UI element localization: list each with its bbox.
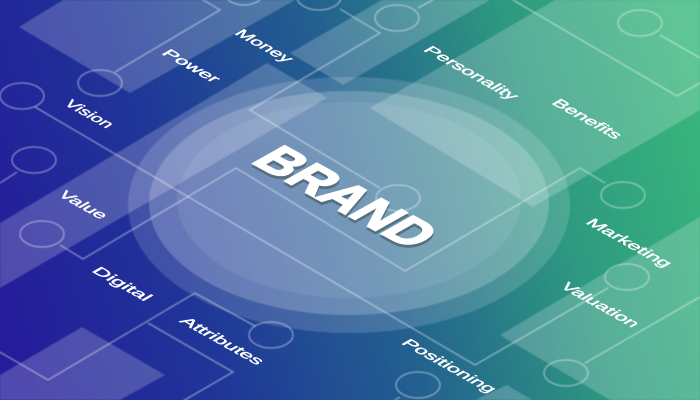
node: attributes	[0, 293, 255, 380]
panel: bottom left	[0, 327, 165, 400]
panel: top left	[19, 0, 295, 93]
node: vision to valuation	[35, 107, 608, 365]
node: top small	[224, 0, 264, 5]
label: Digital: Digital	[88, 265, 156, 303]
node: value to marketing	[60, 168, 605, 271]
label: Power: Power	[157, 47, 224, 85]
node: valuation	[605, 264, 649, 290]
label: Value: Value	[54, 189, 112, 222]
label: Valuation: Valuation	[556, 280, 643, 330]
outer ring	[128, 77, 570, 333]
line: benefits frame	[513, 0, 700, 96]
label: Personality: Personality	[419, 44, 522, 102]
label: Positioning: Positioning	[397, 337, 500, 395]
node: positioning	[395, 397, 400, 400]
central disc rings	[128, 77, 570, 333]
node: marketing	[601, 182, 645, 208]
panel: top right	[370, 0, 700, 207]
label: Vision: Vision	[60, 98, 118, 131]
panel: lower right	[500, 217, 700, 400]
node: lower right	[585, 297, 700, 363]
label: Attributes: Attributes	[175, 315, 268, 367]
title face: BRAND	[240, 138, 452, 255]
node: top	[297, 0, 341, 10]
label: Money: Money	[230, 27, 297, 65]
inner ring	[177, 102, 521, 298]
node: top centre	[418, 0, 436, 8]
line: attributes frame	[148, 323, 233, 400]
title: BRAND	[240, 138, 452, 258]
panel: top centre	[290, 0, 490, 85]
node: centre to money	[250, 9, 380, 188]
label: Marketing: Marketing	[582, 217, 676, 270]
node: top right	[660, 35, 700, 58]
label: Benefits: Benefits	[547, 97, 626, 142]
middle ring	[149, 91, 549, 315]
panel: long left band	[0, 63, 327, 288]
title shadow: BRAND	[240, 141, 452, 258]
node: power	[115, 0, 220, 72]
panel: bottom small	[475, 385, 532, 400]
node: left edge	[0, 172, 17, 183]
